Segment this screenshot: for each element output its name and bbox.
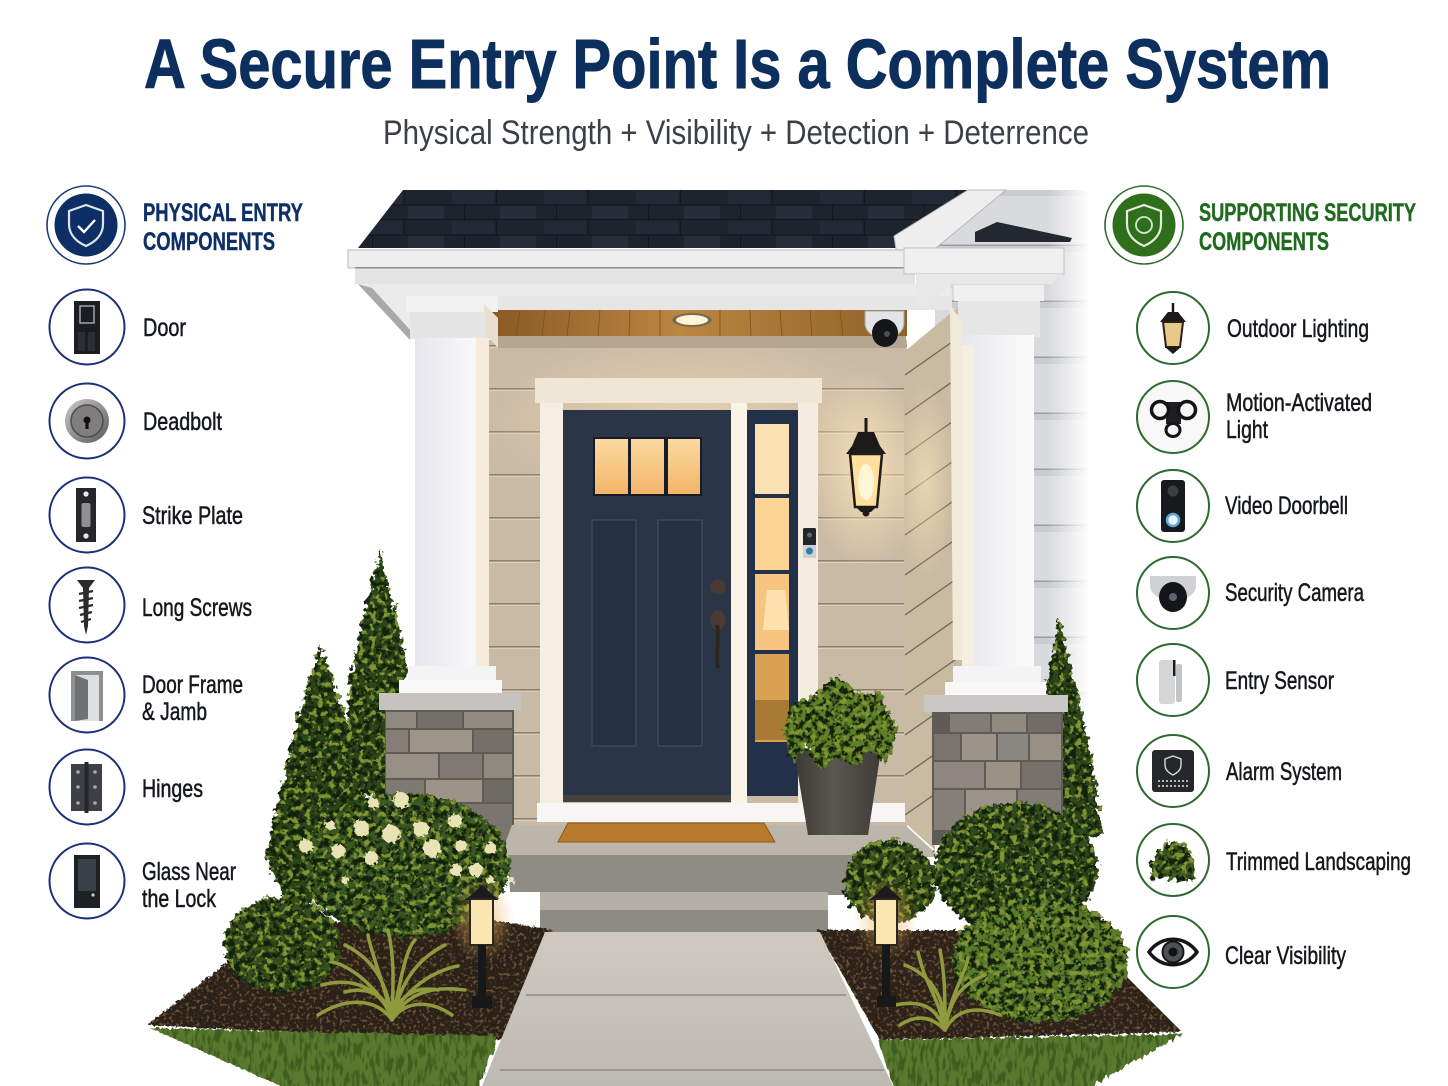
ornamental grass plants (318, 930, 1000, 1030)
item: door frame and jamb (50, 658, 243, 732)
item: alarm system (1137, 735, 1342, 807)
item: door (50, 290, 186, 364)
panel header: supporting security (1105, 186, 1416, 264)
illustration: house entry (147, 190, 1183, 1086)
item: entry sensor (1137, 644, 1334, 716)
panel: physical entry components (47, 186, 303, 918)
item: security camera: Security Camera (1225, 579, 1364, 607)
roof gable trim (894, 190, 1006, 262)
heading (143, 199, 303, 256)
porch side wall (895, 302, 964, 850)
sidelight window (747, 410, 798, 796)
item: glass near the lock: Glass Near (142, 858, 236, 886)
lawn (150, 1028, 1183, 1086)
heading: COMPONENTS (143, 228, 275, 256)
item: outdoor lighting (1137, 292, 1369, 364)
heading (1199, 199, 1416, 256)
fern in planter (782, 675, 898, 771)
item: clear visibility (1137, 916, 1346, 988)
item: motion-activated light: Motion-Activated (1226, 389, 1372, 417)
left column (399, 296, 502, 694)
item: glass near the lock (50, 844, 236, 918)
right column (945, 285, 1046, 696)
item: entry sensor: Entry Sensor (1225, 667, 1334, 695)
icon: green shield (1105, 186, 1183, 264)
right stone pier (924, 695, 1068, 845)
icon: wall lantern (846, 418, 886, 516)
item: door frame and jamb: & Jamb (142, 698, 207, 726)
door trim (535, 378, 905, 822)
panel: supporting security components (1105, 186, 1416, 988)
heading: PHYSICAL ENTRY (143, 199, 303, 227)
roof (358, 190, 968, 248)
flowering shrub (299, 792, 515, 937)
low bushes (224, 802, 1128, 1022)
back wall siding (470, 330, 926, 830)
right path light (854, 876, 918, 1007)
item: hinges (50, 750, 203, 824)
evergreen trees (265, 548, 1103, 905)
flower clusters (299, 792, 515, 884)
mulch beds (147, 905, 1182, 1040)
item: deadbolt (50, 384, 222, 458)
item: door: Door (143, 314, 186, 342)
house side wall (935, 190, 1090, 710)
planter pot (794, 750, 881, 835)
security camera (865, 311, 904, 347)
item: hinges: Hinges (142, 775, 203, 803)
item: motion-activated light: Light (1226, 416, 1268, 444)
ceiling wood soffit with light (492, 308, 907, 348)
item: alarm system: Alarm System (1226, 758, 1342, 786)
video doorbell on wall (803, 528, 816, 558)
item: long screws: Long Screws (142, 594, 252, 622)
fascia and beam (348, 248, 1064, 340)
item: security camera (1137, 557, 1364, 629)
item: clear visibility: Clear Visibility (1225, 942, 1346, 970)
item: strike plate: Strike Plate (142, 502, 243, 530)
concrete walkway (482, 932, 893, 1086)
item: door frame and jamb: Door Frame (142, 671, 243, 699)
front door (563, 410, 731, 802)
icon: shield with check (47, 186, 125, 264)
door mat (558, 823, 775, 842)
item: outdoor lighting: Outdoor Lighting (1227, 315, 1369, 343)
item: strike plate (50, 478, 243, 552)
item: video doorbell (1137, 470, 1348, 542)
item: glass near the lock: the Lock (142, 885, 216, 913)
item: trimmed landscaping (1137, 824, 1411, 896)
item: long screws (50, 568, 252, 642)
heading: COMPONENTS (1199, 228, 1329, 256)
panel header: physical entry (47, 186, 303, 264)
item: deadbolt: Deadbolt (143, 408, 222, 436)
subtitle: Physical Strength + Visibility + Detection + Deterrence (383, 114, 1089, 152)
item: video doorbell: Video Doorbell (1225, 492, 1348, 520)
left stone pier (379, 693, 521, 843)
left path light (450, 878, 514, 1008)
item: motion-activated light (1137, 381, 1372, 453)
porch floor and steps (500, 825, 940, 934)
